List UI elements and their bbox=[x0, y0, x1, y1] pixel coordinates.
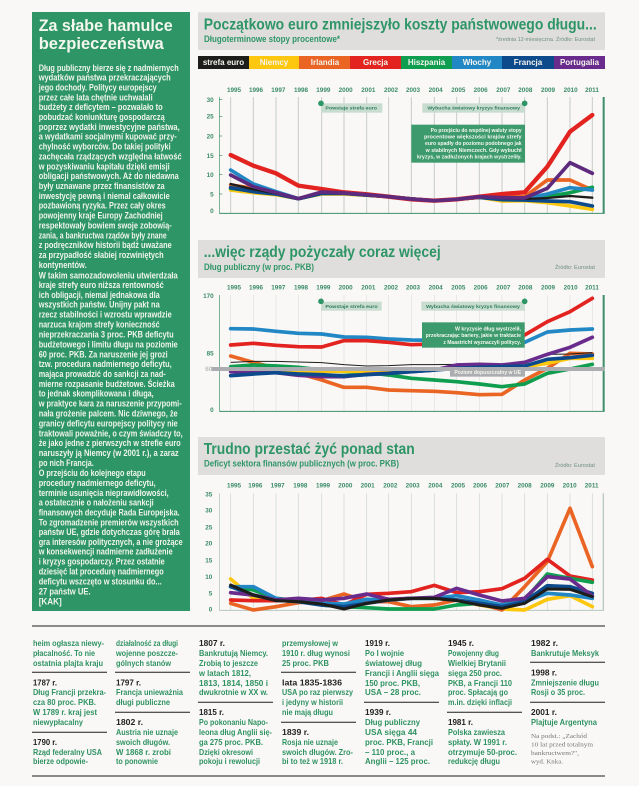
text block: article: a ostatecznie o nałożeniu sankcji bbox=[39, 498, 154, 508]
timeline column 3: leona dług Anglii się- bbox=[199, 727, 272, 737]
callout: w stabilnych Niemczech. Gdy wybuchł bbox=[425, 148, 522, 154]
callout bbox=[422, 322, 525, 348]
event tag: powstaje strefa euro: Powstaje strefa euro bbox=[325, 106, 377, 112]
timeline column 5: światowej dług bbox=[365, 658, 422, 668]
year labels: 2001 bbox=[361, 482, 375, 489]
year labels bbox=[227, 482, 599, 489]
header: chart 3: Trudno przestać żyć ponad stan bbox=[204, 441, 415, 458]
y axis labels bbox=[203, 293, 214, 414]
timeline column 2: 1802 r. bbox=[116, 717, 143, 727]
timeline column 5: Anglii – 125 proc. bbox=[365, 756, 430, 766]
event tag: wybucha światowy kryzys finansowy bbox=[422, 100, 527, 113]
timeline column 1: heim ogłasza niewy- bbox=[33, 638, 104, 648]
timeline column 5: USA – 28 proc. bbox=[365, 687, 421, 697]
year labels: 2010 bbox=[564, 284, 578, 291]
year labels: 2003 bbox=[406, 284, 421, 291]
source note: bankructwem?", bbox=[531, 751, 580, 757]
timeline column 6: sięga 250 proc. bbox=[448, 668, 502, 678]
timeline column 6: 1945 r. bbox=[448, 638, 474, 648]
timeline column 6: 1981 r. bbox=[448, 717, 473, 727]
timeline column 4: 1910 r. dług wynosi bbox=[282, 648, 350, 658]
text block: article: po nich Francja. bbox=[39, 458, 94, 468]
event tag: wybucha światowy kryzys finansowy bbox=[421, 298, 527, 311]
legend bbox=[198, 56, 605, 69]
text block: article: kontynentów. bbox=[39, 260, 87, 270]
text block: article: zachęcała rządzących względna łatwość bbox=[39, 152, 182, 162]
text block: article: budżetowego i limitu długu na poziomie bbox=[39, 340, 178, 350]
text block: article: dziesięć lat procedurę nadmiernego bbox=[39, 567, 164, 577]
year labels: 2006 bbox=[473, 482, 488, 489]
text block: article: mająca prowadzić do sankcji za nad- bbox=[39, 369, 166, 379]
event tag: powstaje strefa euro bbox=[318, 100, 382, 113]
text block: article: zania, a bankructwa rządów były znane bbox=[39, 230, 167, 240]
legend: Niemcy bbox=[260, 58, 289, 67]
data lines bbox=[231, 115, 592, 209]
year labels: 1996 bbox=[249, 284, 264, 291]
year labels: 2007 bbox=[496, 87, 511, 94]
event tag: wybucha światowy kryzys finansowy: Wybucha światowy kryzys finansowy bbox=[426, 304, 520, 310]
heading: bezpieczeństwa bbox=[39, 34, 164, 53]
timeline column 4: swoich długów. Zro- bbox=[282, 747, 353, 757]
timeline column 5: 150 proc. PKB, bbox=[365, 678, 420, 688]
header: chart 3 bbox=[198, 437, 605, 475]
timeline column 7: Plajtuje Argentyna bbox=[531, 717, 597, 727]
year labels: 2004 bbox=[428, 482, 443, 489]
year labels: 2010 bbox=[564, 87, 578, 94]
text block: article: a wydatkami socjalnymi kupować przy- bbox=[39, 132, 177, 142]
year labels: 2009 bbox=[540, 482, 555, 489]
text block: article: powojenny kraje Europy Zachodniej bbox=[39, 211, 163, 221]
year labels: 2005 bbox=[451, 87, 466, 94]
year labels: 2011 bbox=[585, 284, 599, 291]
year labels: 1997 bbox=[271, 482, 285, 489]
timeline column 6 bbox=[447, 638, 522, 766]
text block: article: pozbawioną ryzyka. Przez cały okres bbox=[39, 201, 166, 211]
timeline column 5: proc. PKB, Francji bbox=[365, 737, 433, 747]
header: chart 3: Źródło: Eurostat bbox=[555, 462, 595, 469]
timeline column 7: 1998 r. bbox=[531, 668, 557, 678]
y axis labels: 5 bbox=[210, 191, 214, 198]
y axis labels: 0 bbox=[209, 606, 213, 613]
y axis labels: 10 bbox=[207, 172, 214, 179]
timeline column 1: ostatnia plajta kraju bbox=[33, 658, 103, 668]
text block: article: chylność wyborców. Do takiej polityki bbox=[39, 142, 171, 152]
text block: article: gra interesów politycznych, a nie grożące bbox=[39, 537, 183, 547]
timeline column 3: Bankrutują Niemcy. bbox=[199, 648, 268, 658]
year labels: 2007 bbox=[495, 482, 510, 489]
timeline column 6: m.in. dzięki inflacji bbox=[448, 697, 512, 707]
text block: article: państw UE, gdzie dotychczas górę brała bbox=[39, 527, 180, 537]
year labels: 2001 bbox=[361, 87, 376, 94]
timeline column 1: płacalność. To nie bbox=[33, 648, 95, 658]
header: chart 1: *średnia 12-miesięczna. Źródło: Eurostat bbox=[496, 36, 595, 43]
text block: article: inwestycję pewną i niemal całkowicie bbox=[39, 191, 170, 201]
text block: article: Dług publiczny bierze się z nadmiernych bbox=[39, 63, 179, 73]
year labels: 2000 bbox=[338, 482, 353, 489]
y axis labels bbox=[207, 97, 214, 215]
timeline column 5: 1939 r. bbox=[365, 707, 391, 717]
timeline column 1: 1790 r. bbox=[33, 737, 57, 747]
y axis labels: 20 bbox=[205, 541, 213, 548]
timeline column 7: 1982 r. bbox=[531, 638, 558, 648]
text block: article: że jako jedne z pierwszych w strefie euro bbox=[39, 438, 181, 448]
event tag: powstaje strefa euro bbox=[318, 298, 382, 311]
header: chart 2: Źródło: Eurostat bbox=[555, 264, 595, 271]
legend: Włochy bbox=[463, 58, 492, 67]
year labels: 1998 bbox=[293, 482, 308, 489]
year labels: 1998 bbox=[294, 87, 309, 94]
timeline column 6: PKB, a Francji 110 bbox=[448, 678, 512, 688]
timeline column 4: bi to też w 1918 r. bbox=[282, 756, 343, 766]
legend: strefa euro bbox=[203, 58, 244, 67]
timeline column 2 bbox=[115, 638, 190, 766]
text block: article: tzw. procedura nadmiernego deficytu, bbox=[39, 359, 172, 369]
timeline column 2: wojenne poszcze- bbox=[115, 648, 178, 658]
timeline column 7: Zmniejszenie długu bbox=[531, 678, 599, 688]
y axis labels: 0 bbox=[210, 407, 214, 414]
timeline column 6: Polska zawiesza bbox=[448, 727, 505, 737]
header: chart 1 bbox=[198, 12, 605, 50]
text block: article: terminie usunięcia nieprawidłowości, bbox=[39, 488, 169, 498]
text block: article: mierne rozpasanie budżetowe. Ścieżka bbox=[39, 378, 175, 389]
source note: Na podst.: „Zachód bbox=[531, 734, 587, 740]
year labels: 1998 bbox=[294, 284, 309, 291]
timeline column 4: i jedyny w historii bbox=[282, 697, 343, 707]
timeline column 2: W 1868 r. zrobi bbox=[116, 747, 171, 757]
timeline column 1: bierze odpowie- bbox=[33, 756, 88, 766]
year labels: 2002 bbox=[383, 482, 398, 489]
y axis labels bbox=[205, 491, 213, 613]
timeline column 2: Francja unieważnia bbox=[116, 687, 183, 697]
timeline column 2: 1797 r. bbox=[116, 678, 141, 688]
text block: article: W takim samozadowoleniu utwierdzała bbox=[39, 271, 178, 281]
text block: article: traktowali poważnie, o czym świadczy to, bbox=[39, 428, 183, 438]
timeline column 6: Wielkiej Brytanii bbox=[448, 658, 506, 668]
year labels: 2002 bbox=[384, 284, 399, 291]
text block: article: i kryzys gospodarczy. Przez ostatnie bbox=[39, 557, 165, 567]
timeline column 1: 1787 r. bbox=[33, 678, 57, 688]
timeline column 3: Dzięki okresowi bbox=[199, 747, 253, 757]
year labels bbox=[227, 284, 599, 291]
heading bbox=[39, 16, 173, 53]
y axis labels: 25 bbox=[207, 114, 214, 121]
timeline column 6: spłaty. W 1991 r. bbox=[448, 737, 507, 747]
timeline column 5: Francji i Anglii sięga bbox=[365, 668, 439, 678]
callout: przekraczając bariery, jakie w traktacie bbox=[426, 333, 521, 339]
year labels: 2009 bbox=[541, 87, 556, 94]
source note bbox=[531, 734, 593, 766]
text block: article: O przejściu do kolejnego etapu bbox=[39, 468, 146, 478]
text block: article: były uznawane przez finansistów za bbox=[39, 181, 165, 191]
timeline column 4: lata 1835-1836 bbox=[282, 678, 342, 688]
timeline column 3: w latach 1812, bbox=[198, 668, 251, 678]
year labels: 1995 bbox=[227, 87, 242, 94]
text block: article: z podręczników historii bądź uważane bbox=[39, 240, 172, 250]
timeline column 4: USA po raz pierwszy bbox=[282, 687, 353, 697]
y axis labels: 10 bbox=[205, 574, 213, 581]
callout: procentowe większości krajów strefy bbox=[424, 135, 522, 141]
text block: article: [KAK] bbox=[39, 596, 62, 606]
year labels: 2011 bbox=[585, 482, 599, 489]
timeline column 4: nie mają długu bbox=[282, 707, 333, 717]
limit band: Poziom dopuszczalny w UE bbox=[454, 370, 522, 376]
timeline column 5: USA sięga 44 bbox=[365, 727, 417, 737]
text block: article: kraje strefy euro niższa rentowność bbox=[39, 280, 164, 290]
y axis labels: 35 bbox=[205, 491, 213, 498]
year labels: 1997 bbox=[271, 87, 286, 94]
limit band bbox=[212, 367, 604, 377]
legend: Portugalia bbox=[560, 58, 600, 67]
legend: Hiszpania bbox=[408, 58, 446, 67]
timeline column 5: Po I wojnie bbox=[365, 648, 404, 658]
year labels: 2005 bbox=[451, 284, 466, 291]
timeline: history of defaults bbox=[32, 626, 605, 776]
timeline column 6: Powojenny dług bbox=[448, 648, 499, 658]
text block: article: w praktyce kara za naruszenie przypomi- bbox=[38, 399, 182, 409]
heading: Za słabe hamulce bbox=[39, 16, 173, 35]
timeline column 5: – 110 proc., a bbox=[365, 747, 415, 757]
timeline column 3: dwukrotnie w XX w. bbox=[199, 687, 268, 697]
panel: za słabe hamulce bezpieczeństwa bbox=[32, 12, 190, 611]
callout bbox=[411, 125, 525, 163]
callout: euro spadły do poziomu podobnego jak bbox=[425, 141, 522, 147]
year labels: 2008 bbox=[518, 284, 533, 291]
timeline column 1: niewypłacalny bbox=[33, 717, 83, 727]
year labels: 1999 bbox=[316, 284, 331, 291]
y axis labels: 170 bbox=[203, 293, 214, 300]
data lines bbox=[231, 508, 592, 610]
timeline column 4: Rosja nie uznaje bbox=[282, 737, 338, 747]
header: chart 1: Długoterminowe stopy procentowe* bbox=[204, 34, 340, 44]
text block: article: nała grożenie palcem. Nic dziwnego, że bbox=[39, 409, 178, 419]
header: chart 2: Dług publiczny (w proc. PKB) bbox=[204, 262, 314, 272]
callout: W kryzysie dług wystrzelił, bbox=[455, 327, 522, 333]
timeline column 2: gólnych stanów bbox=[116, 658, 171, 668]
text block: article: granicy deficytu europejscy politycy nie bbox=[39, 419, 178, 429]
text block: article: pobudzać koniunkturę gospodarczą bbox=[39, 112, 165, 122]
timeline column 2: to ponownie bbox=[116, 756, 158, 766]
year labels: 2000 bbox=[339, 284, 353, 291]
year labels: 2010 bbox=[563, 482, 577, 489]
text block: article: w konsekwencji nadmierne zadłużenie bbox=[38, 547, 173, 557]
text block: article: deficytu wszczęto w stosunku do... bbox=[39, 577, 162, 587]
timeline column 6: redukcję długu bbox=[448, 756, 500, 766]
text block: article: przez całe lata chętnie uchwalali bbox=[39, 92, 153, 102]
line chart: budget deficit bbox=[205, 482, 604, 613]
y axis labels: 0 bbox=[210, 208, 214, 215]
header: chart 2 bbox=[198, 240, 605, 278]
text block: article: respektowały bowiem swoje zobowią- bbox=[39, 220, 172, 230]
year labels: 2006 bbox=[474, 87, 488, 94]
timeline column 5 bbox=[364, 638, 439, 766]
timeline column 2: działalność za długi bbox=[116, 638, 178, 648]
y axis labels: 5 bbox=[209, 591, 213, 598]
year labels: 2006 bbox=[474, 284, 488, 291]
data lines bbox=[231, 298, 592, 395]
year labels: 2004 bbox=[429, 87, 443, 94]
timeline column 1: cza 80 proc. PKB. bbox=[33, 697, 96, 707]
timeline column 3: 1807 r. bbox=[199, 638, 225, 648]
year labels: 2011 bbox=[585, 87, 599, 94]
timeline column 1: Rząd federalny USA bbox=[33, 747, 102, 757]
timeline column 7: Bankrutuje Meksyk bbox=[531, 648, 599, 658]
year labels: 1997 bbox=[271, 284, 286, 291]
year labels: 2005 bbox=[451, 482, 466, 489]
text block: article: wszystkich państw. Unijny pakt na bbox=[38, 300, 160, 310]
text block: article: poprzez wydatki inwestycyjne państwa, bbox=[39, 122, 180, 132]
year labels: 1999 bbox=[316, 482, 331, 489]
year labels: 2007 bbox=[496, 284, 511, 291]
timeline column 3 bbox=[198, 638, 273, 766]
year labels: 1996 bbox=[249, 87, 264, 94]
timeline column 3: pokoju i rewolucji bbox=[199, 756, 260, 766]
year labels bbox=[227, 87, 599, 94]
text block: article: To zgromadzenie premierów wszystkich bbox=[39, 517, 179, 527]
text block: article: budżety z deficytem – pozwalało to bbox=[39, 102, 163, 112]
timeline column 2: swoich długów. bbox=[116, 737, 170, 747]
timeline column 4: przemysłowej w bbox=[282, 638, 338, 648]
timeline column 2: Austria nie uznaje bbox=[116, 727, 178, 737]
timeline column 3: 1813, 1814, 1850 i bbox=[199, 678, 268, 688]
year labels: 1999 bbox=[316, 87, 331, 94]
text block: article: obligacji państwowych. Aż do niedawna bbox=[39, 171, 179, 181]
year labels: 2004 bbox=[429, 284, 443, 291]
timeline column 4: 25 proc. PKB bbox=[282, 658, 329, 668]
text block: article: 27 państw UE. bbox=[39, 587, 91, 597]
timeline column 1: W 1789 r. kraj jest bbox=[33, 707, 97, 717]
y axis labels: 60 bbox=[205, 366, 213, 373]
timeline column 3: Zrobią to jeszcze bbox=[199, 658, 258, 668]
year labels: 2003 bbox=[406, 87, 421, 94]
timeline column 3: ga 275 proc. PKB. bbox=[199, 737, 263, 747]
callout: kryzys, w zadłużonych krajach wystrzeliły. bbox=[417, 155, 522, 161]
year labels: 1995 bbox=[227, 284, 242, 291]
year labels: 2002 bbox=[384, 87, 399, 94]
text block: article: nieprzekraczania 3 proc. PKB deficytu bbox=[39, 330, 174, 340]
year labels: 2000 bbox=[339, 87, 353, 94]
text block: article: procedury nadmiernego deficytu, bbox=[39, 478, 156, 488]
year labels: 2008 bbox=[518, 87, 533, 94]
y axis labels: 20 bbox=[207, 133, 214, 140]
timeline column 7 bbox=[530, 638, 605, 766]
year labels: 2009 bbox=[541, 284, 556, 291]
line chart: public debt bbox=[203, 284, 605, 414]
timeline column 1 bbox=[32, 638, 107, 766]
text block: article: za przypadłość słabiej rozwiniętych bbox=[39, 250, 164, 260]
text block: article: rzecz stabilności i wzrostu wprawdzie bbox=[39, 310, 172, 320]
year labels: 2003 bbox=[406, 482, 420, 489]
event tag: powstaje strefa euro: Powstaje strefa euro bbox=[325, 304, 378, 310]
timeline column 5: 1919 r. bbox=[365, 638, 390, 648]
text block: article: narzuca krajom strefy konieczność bbox=[39, 320, 160, 330]
y axis labels: 15 bbox=[207, 153, 214, 160]
timeline column 3: 1815 r. bbox=[199, 707, 224, 717]
year labels: 2008 bbox=[518, 482, 532, 489]
legend: Francja bbox=[514, 58, 543, 67]
timeline column 6: otrzymuje 50-proc. bbox=[448, 747, 517, 757]
event tag: wybucha światowy kryzys finansowy: Wybucha światowy kryzys finansowy bbox=[427, 106, 520, 112]
header: chart 3: Deficyt sektora finansów publicznych (w proc. PKB) bbox=[204, 459, 399, 469]
timeline column 3: Po pokonaniu Napo- bbox=[199, 717, 268, 727]
text block: article: ich obligacji, niemal jednakowa dla bbox=[39, 290, 160, 300]
text block: article: wydatków państwa przekraczających bbox=[38, 73, 171, 83]
year labels: 2001 bbox=[361, 284, 376, 291]
y axis labels: 30 bbox=[205, 508, 213, 515]
year labels: 1996 bbox=[248, 482, 263, 489]
source note: wyd. Knka. bbox=[531, 760, 564, 766]
callout: Po przejściu do wspólnej waluty stopy bbox=[431, 128, 522, 134]
timeline column 4 bbox=[281, 638, 356, 766]
callout: z Maastricht wyznaczyli politycy. bbox=[443, 340, 522, 346]
timeline column 1: Dług Francji przekra- bbox=[33, 687, 106, 697]
timeline column 2: długi publiczne bbox=[116, 697, 170, 707]
text block: article bbox=[38, 63, 183, 607]
source note: 10 lat przed totalnym bbox=[531, 742, 593, 748]
text block: article: to jednak skomplikowana i długa, bbox=[39, 389, 154, 399]
legend: Irlandia bbox=[311, 58, 340, 67]
legend: Grecja bbox=[363, 58, 389, 67]
header: chart 2: ...więc rządy pożyczały coraz więcej bbox=[204, 244, 441, 261]
text block: article: jego dochody. Politycy europejscy bbox=[38, 82, 157, 92]
line chart: interest rates bbox=[207, 87, 605, 215]
y axis labels: 25 bbox=[205, 524, 213, 531]
text block: article: finansowych decyduje Rada Europejska. bbox=[39, 508, 180, 518]
timeline column 7: 2001 r. bbox=[531, 707, 557, 717]
timeline column 4: 1839 r. bbox=[282, 727, 309, 737]
timeline column 6: proc. Spłacają go bbox=[448, 687, 508, 697]
year labels: 1995 bbox=[227, 482, 242, 489]
text block: article: 60 proc. PKB. Za naruszenie jej grozi bbox=[39, 349, 168, 359]
text block: article: naruszyły ją Niemcy (w 2001 r.), a zaraz bbox=[39, 448, 179, 458]
timeline column 7: Rosji o 35 proc. bbox=[531, 687, 585, 697]
y axis labels: 15 bbox=[205, 557, 213, 564]
y axis labels: 85 bbox=[207, 350, 214, 357]
y axis labels: 30 bbox=[207, 97, 214, 104]
timeline column 5: Dług publiczny bbox=[365, 717, 420, 727]
text block: article: w pozyskiwaniu kapitału dzięki emisji bbox=[38, 161, 170, 171]
